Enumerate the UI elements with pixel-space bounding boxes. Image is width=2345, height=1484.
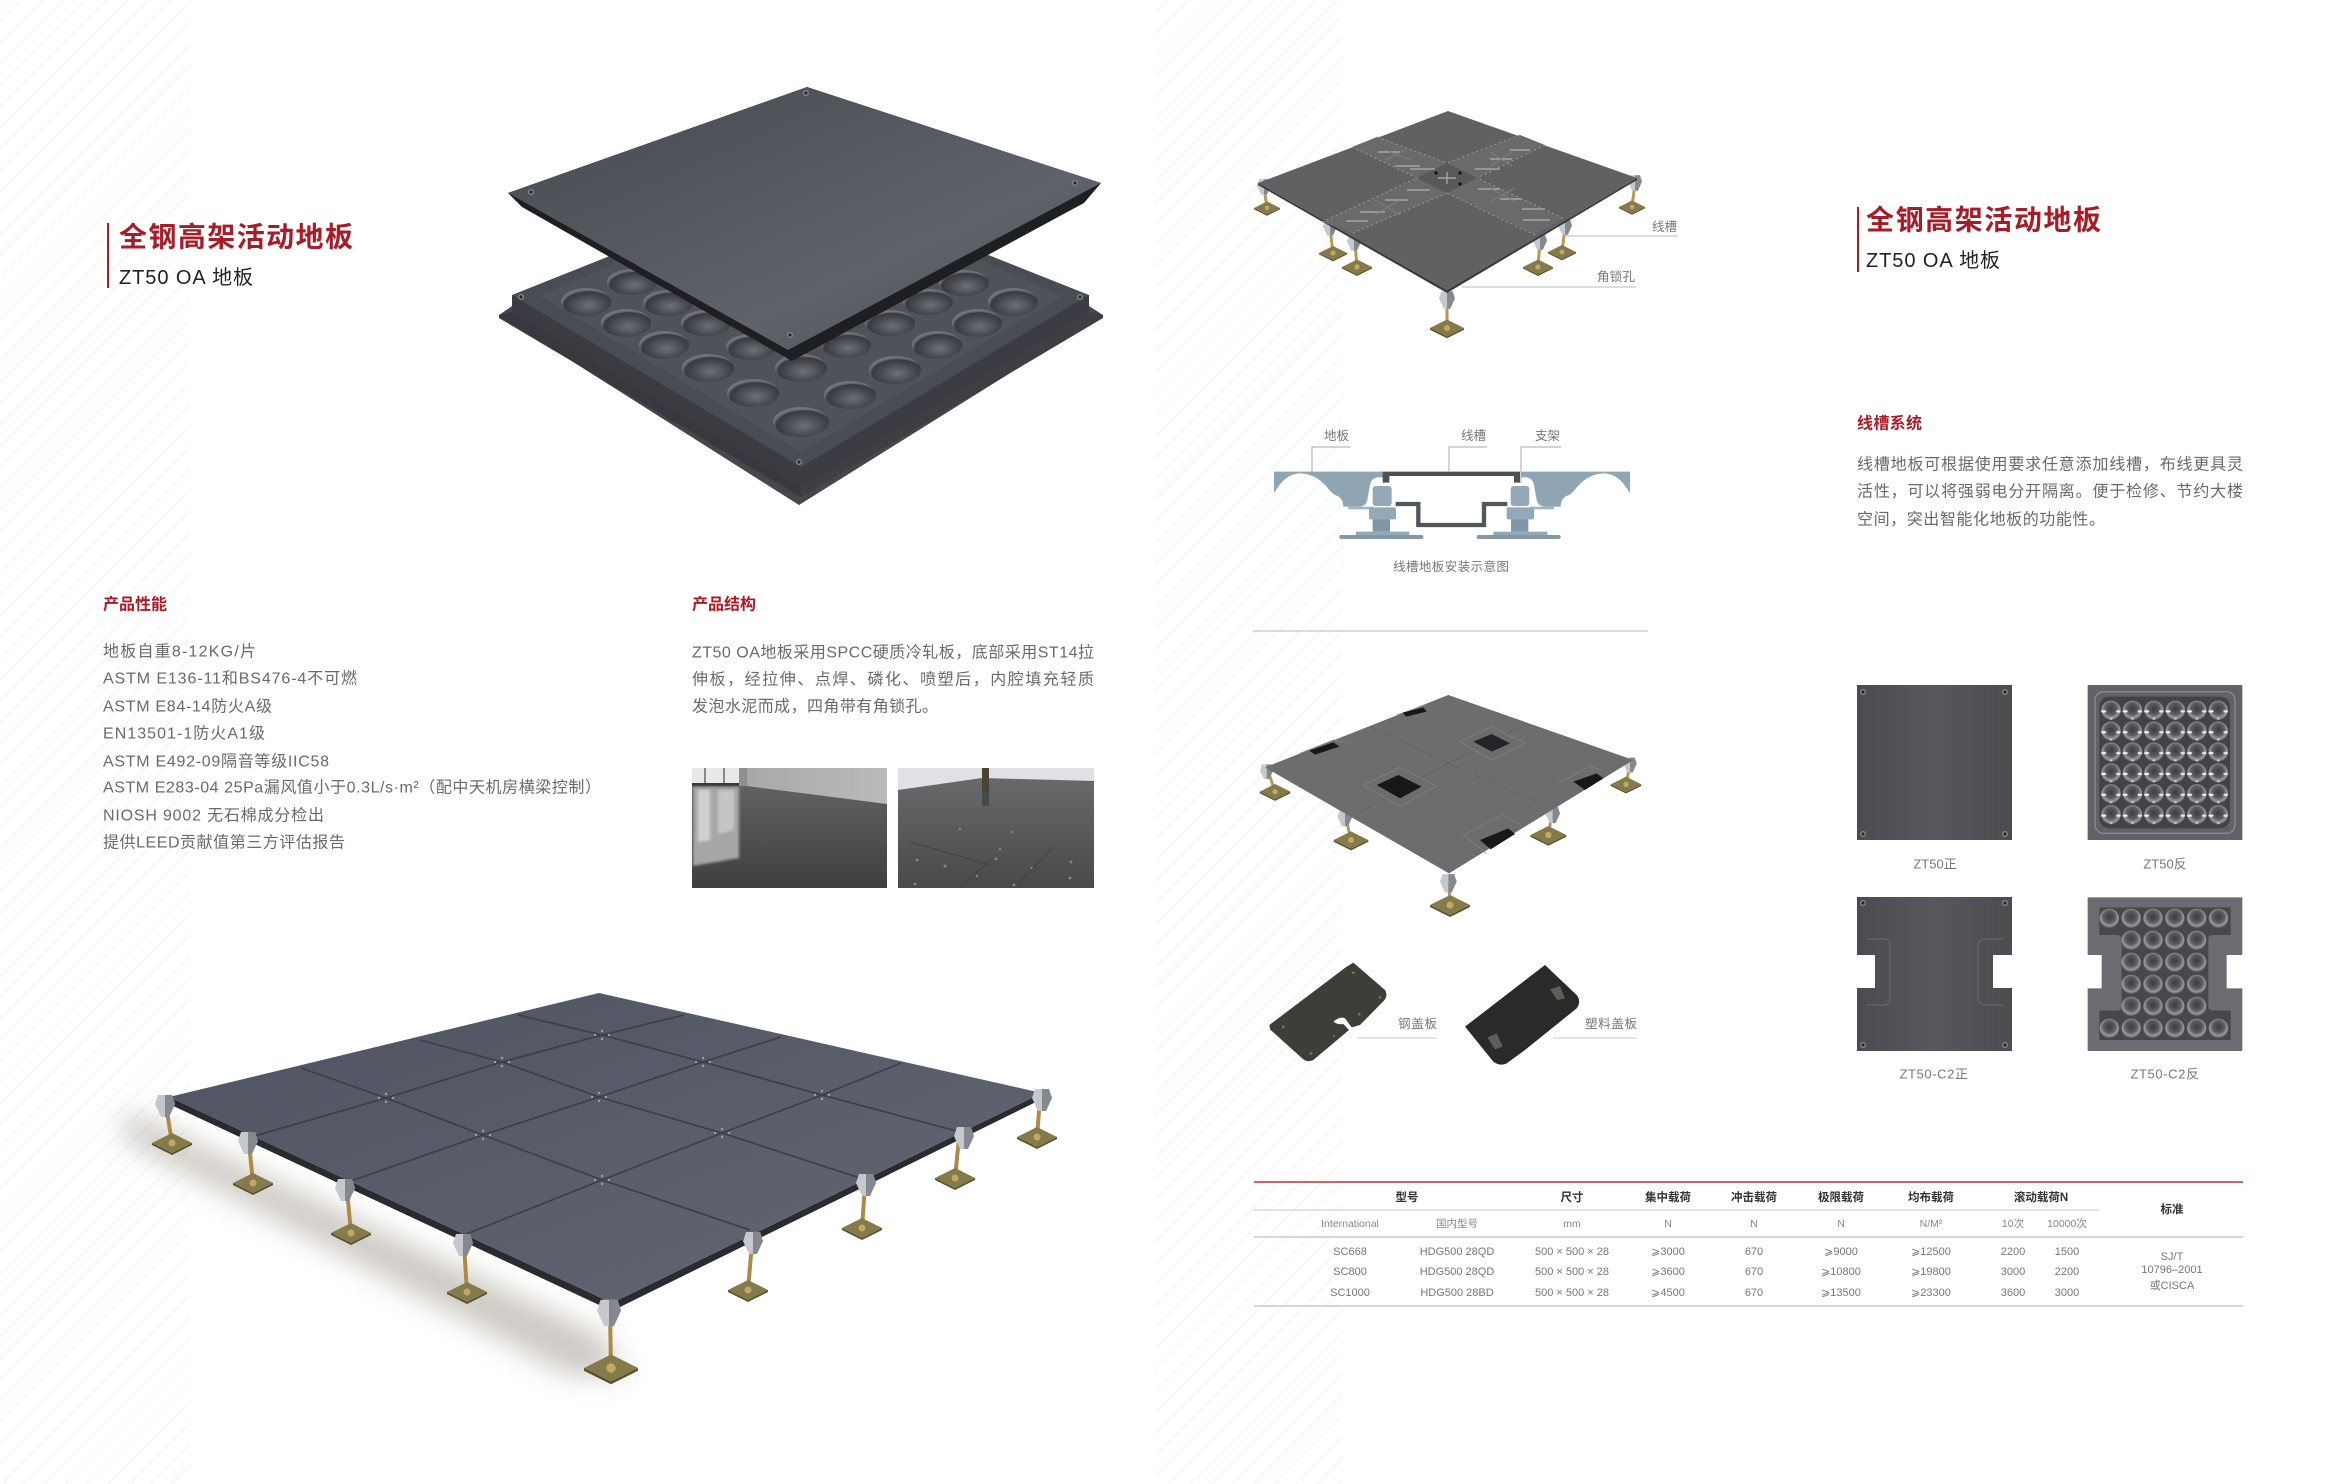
heading: right page title: ZT50 OA 地板 [1866,249,2000,272]
performance list: ASTM E492-09隔音等级IIC58 [103,752,329,770]
heading: left page title: 全钢高架活动地板 [119,222,353,252]
figure: floor with outlet boxes [1260,695,1641,917]
table row: SC668: 670 [1745,1246,1763,1258]
performance list: ASTM E136-11和BS476-4不可燃 [103,670,357,688]
table units row: N [1750,1218,1758,1230]
performance list: 提供LEED贡献值第三方评估报告 [103,834,345,852]
table units row: N/M² [1920,1218,1943,1230]
trough pedestals [1254,175,1645,338]
product tile: ZT50 front [1857,685,2012,872]
table row: SC668: 500 × 500 × 28 [1535,1246,1609,1258]
table row: SC1000: 670 [1745,1287,1763,1299]
table row: SC800: 2200 [2055,1266,2079,1278]
performance list: ASTM E84-14防火A级 [103,698,272,716]
trough system paragraph: 空间，突出智能化地板的功能性。 [1857,510,2105,528]
table header: 均布载荷 [1908,1190,1954,1204]
structure paragraph [692,644,1094,716]
product tile: ZT50 back [2088,685,2242,872]
table header: 集中载荷 [1645,1190,1691,1204]
heading: left page title [107,222,353,289]
floor shadow [125,1110,625,1375]
performance list: NIOSH 9002 无石棉成分检出 [103,806,324,824]
table row: SC668: 2200 [2001,1246,2025,1258]
table row: SC668: ⩾9000 [1824,1246,1858,1258]
section: wire trough system text: 线槽系统 [1857,414,1922,432]
caption: installation diagram: 线槽地板安装示意图 [1393,559,1509,574]
table row: SC668: 1500 [2055,1246,2079,1258]
table row: SC1000: 3600 [2001,1287,2025,1299]
callout: steel cover plate [1357,1017,1437,1038]
performance list: 地板自重8-12KG/片 [103,642,256,660]
label: 支架: 支架 [1535,429,1560,443]
table row: SC1000 [1330,1287,2079,1299]
table header: 型号 [1396,1191,1418,1204]
outlet boxes [1309,707,1603,849]
product tile: ZT50-C2 back [2088,897,2242,1082]
table row: SC800: ⩾19800 [1911,1266,1951,1278]
product tile: ZT50-C2 front [1857,897,2012,1082]
section: product structure [692,596,1094,716]
trough deck [1258,111,1637,293]
table row: SC800: SC800 [1333,1266,1367,1278]
table header: 滚动载荷N [2014,1190,2068,1204]
callout: plastic cover plate [1553,1016,1637,1038]
label: 地板 [1312,429,1350,472]
table: load specifications [1254,1182,2243,1306]
table header: 标准 [2160,1202,2184,1216]
table row: SC1000: ⩾4500 [1651,1287,1685,1299]
section: product performance [103,594,601,852]
label: 线槽 [1449,429,1487,472]
table row: SC668: HDG500 28QD [1420,1246,1494,1258]
heading: left page title: ZT50 OA 地板 [119,266,253,289]
table row: SC1000: HDG500 28BD [1420,1287,1494,1299]
table units row [1321,1217,2087,1230]
structure paragraph: 伸板，经拉伸、点焊、磷化、喷塑后，内腔填充轻质 [692,670,1094,688]
table standard column: SJ/T [2161,1251,2184,1263]
table header: 冲击载荷 [1731,1190,1777,1204]
section: product structure: 产品结构 [692,596,756,614]
top panel [508,87,1101,361]
table row: SC1000: 3000 [2055,1287,2079,1299]
table standard column: 或CISCA [2150,1279,2195,1292]
trough system paragraph: 线槽地板可根据使用要求任意添加线槽，布线更具灵 [1857,454,2243,474]
icon: plastic cover plate [1465,965,1579,1065]
trough system paragraph [1857,454,2243,528]
photo: installed floor with column [898,768,1094,888]
label: 线槽: 线槽 [1461,429,1486,443]
figure: exploded floor panel [499,87,1103,505]
structure paragraph: 发泡水泥而成，四角带有角锁孔。 [692,698,938,716]
pedestal supports [152,1098,1057,1384]
heading: right page title [1857,204,2101,272]
table row: SC1000: SC1000 [1330,1287,1370,1299]
table units row: mm [1563,1218,1581,1230]
table row: SC800: ⩾10800 [1821,1266,1861,1278]
table header: 尺寸 [1560,1190,1584,1204]
performance list [103,642,601,852]
figure: large raised floor assembly [125,993,1057,1384]
figure: trough floor perspective [1254,111,1678,338]
table row: SC1000: ⩾23300 [1911,1287,1951,1299]
product tile: ZT50-C2 back: ZT50-C2反 [2130,1066,2200,1082]
callout: 角锁孔: 角锁孔 [1597,269,1635,284]
pedestal heads [155,1089,1052,1326]
table units row: 10次 [2002,1217,2025,1230]
callout: steel cover plate: 钢盖板 [1398,1017,1437,1031]
callout: plastic cover plate: 塑料盖板 [1585,1016,1637,1031]
table row: SC668: SC668 [1333,1246,1367,1258]
label: 支架 [1521,429,1561,483]
table row: SC1000: 500 × 500 × 28 [1535,1287,1609,1299]
table units row: 国内型号 [1436,1217,1478,1230]
table row: SC800 [1333,1266,2079,1278]
callout: 线槽 [1565,220,1678,236]
section: wire trough system text [1857,414,2243,528]
table row: SC800: 500 × 500 × 28 [1535,1266,1609,1278]
diagram: trough floor installation cross-section [1274,429,1630,574]
outlet floor pedestals [1260,758,1641,917]
table row: SC800: ⩾3600 [1651,1266,1685,1278]
section: product performance: 产品性能 [103,594,167,614]
callout: 线槽: 线槽 [1652,220,1677,234]
section drawing [1274,472,1630,539]
table standard column [2141,1251,2203,1292]
table units row: International [1321,1218,1379,1230]
table row: SC668: ⩾3000 [1651,1246,1685,1258]
tray underside [499,180,1103,505]
table header [1396,1190,2184,1216]
trough system paragraph: 活性，可以将强弱电分开隔离。便于检修、节约大楼 [1857,482,2243,500]
table header: 极限载荷 [1818,1190,1864,1204]
table row: SC668: ⩾12500 [1911,1246,1951,1258]
photo: installed floor with window reflection [692,768,887,888]
performance list: EN13501-1防火A1级 [103,724,265,742]
product tile: ZT50-C2 front: ZT50-C2正 [1899,1066,1969,1082]
outlet floor deck [1265,695,1633,873]
table row: SC800: 3000 [2001,1266,2025,1278]
heading: right page title: 全钢高架活动地板 [1866,204,2101,236]
floor deck [169,993,1042,1311]
structure paragraph: ZT50 OA地板采用SPCC硬质冷轧板，底部采用ST14拉 [692,644,1094,662]
table row: SC1000: ⩾13500 [1821,1287,1861,1299]
table units row: N [1664,1218,1672,1230]
table units row: N [1837,1218,1845,1230]
product tile: ZT50 front: ZT50正 [1913,856,1957,872]
table row: SC800: 670 [1745,1266,1763,1278]
table standard column: 10796–2001 [2141,1264,2203,1276]
performance list: ASTM E283-04 25Pa漏风值小于0.3L/s·m²（配中天机房横梁控制） [103,778,601,796]
product tile: ZT50 back: ZT50反 [2143,856,2187,872]
table row: SC800: HDG500 28QD [1420,1266,1494,1278]
table row: SC668 [1333,1246,2079,1258]
icon: steel cover plate [1269,963,1386,1061]
label: 地板: 地板 [1324,429,1349,443]
table units row: 10000次 [2047,1217,2087,1230]
